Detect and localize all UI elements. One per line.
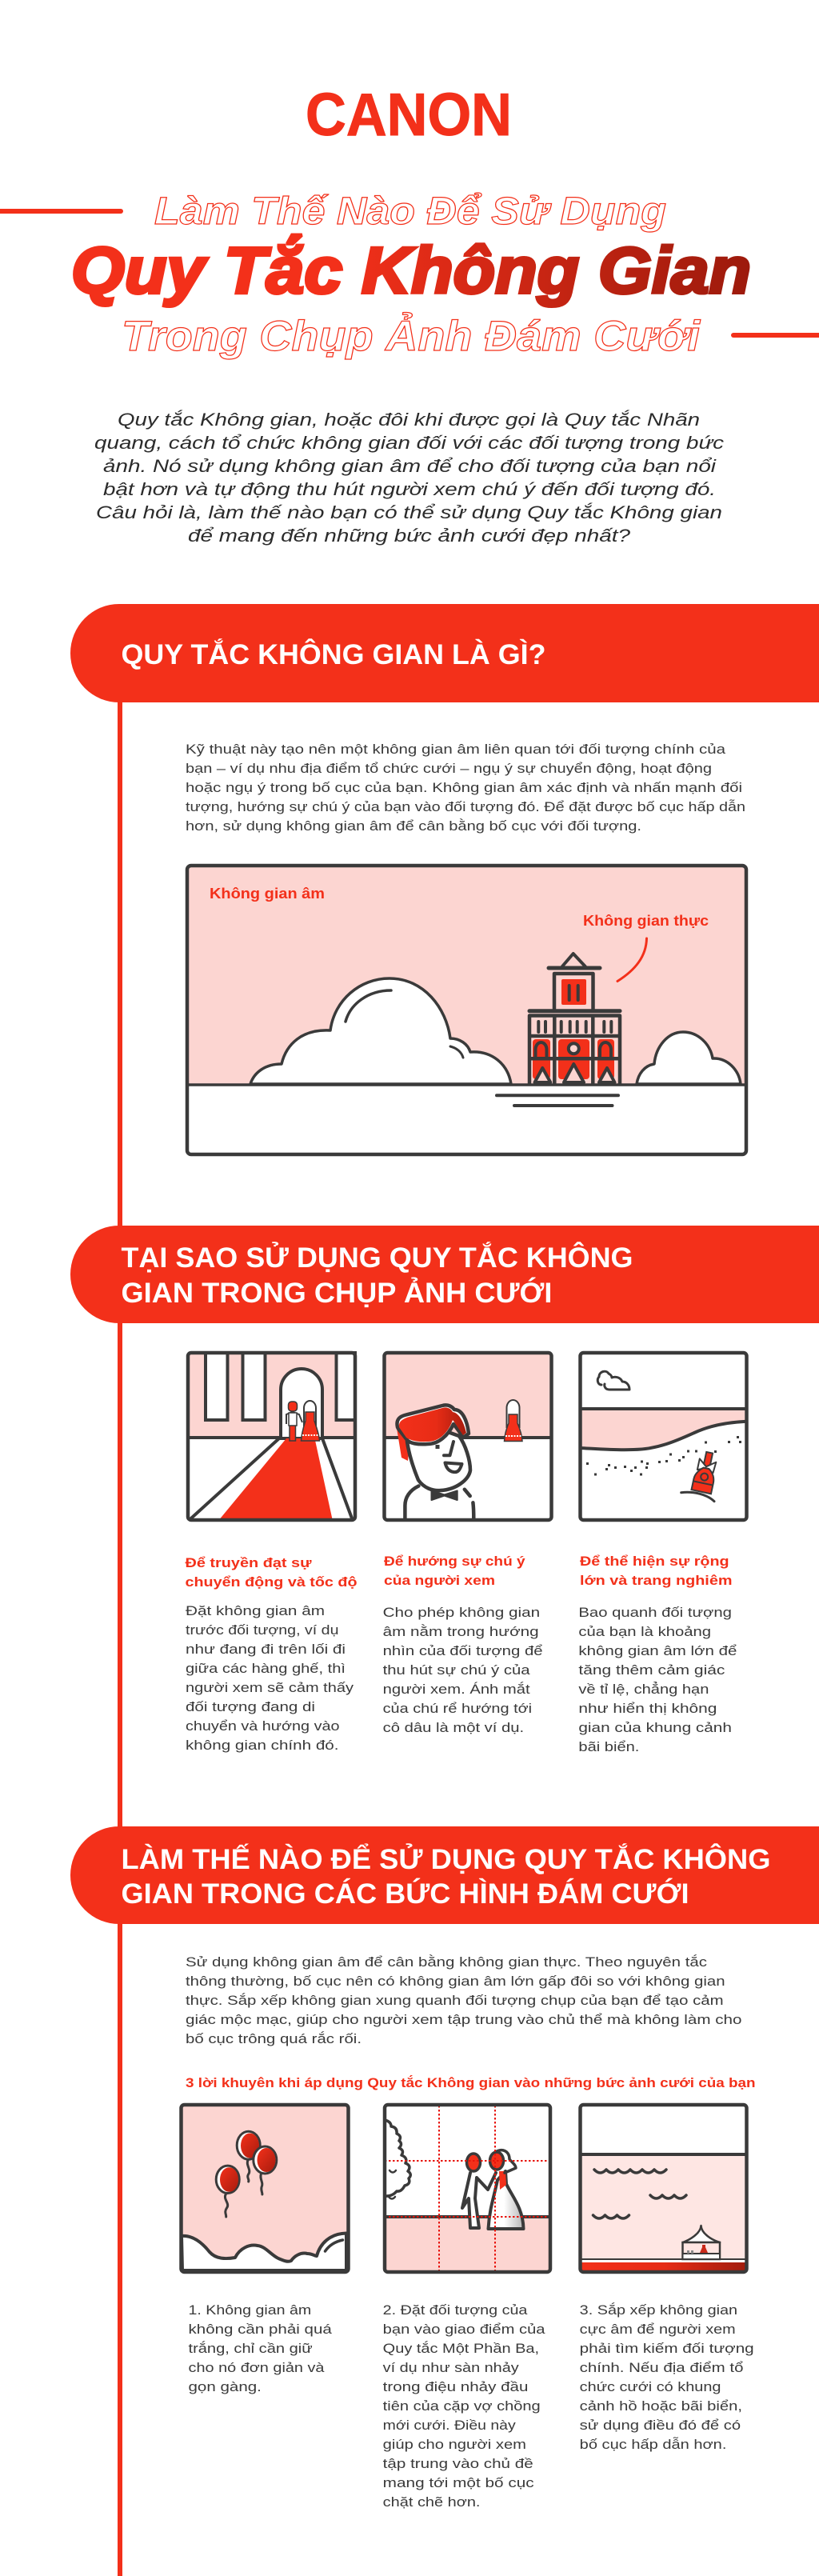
- red carpet: [220, 1438, 333, 1519]
- section 1 body text: [186, 742, 745, 834]
- panel: rule of thirds couple: [385, 2105, 550, 2272]
- section 3 header band: LÀM THẾ NÀO ĐỂ SỬ DỤNG QUY TẮC KHÔNG: [122, 1843, 771, 1875]
- section 1 body text: tượng, hướng sự chú ý của bạn vào đối tượng đó. Để đặt được bố cục hấp dẫn: [186, 799, 745, 814]
- title line 2: Quy Tắc Không Gian: [71, 234, 751, 307]
- column 2: directing attention: cô dâu là một ví dụ.: [383, 1720, 524, 1735]
- panel: aisle with couple: [188, 1353, 355, 1520]
- groom: [286, 1402, 302, 1441]
- intro paragraph: [94, 410, 724, 546]
- small bride: [504, 1400, 522, 1442]
- intro paragraph: để mang đến những bức ảnh cưới đẹp nhất?: [188, 526, 631, 546]
- tip 3 text: sử dụng điều đó để có: [580, 2418, 741, 2433]
- intro paragraph: Câu hỏi là, làm thế nào bạn có thể sử dụng Quy tắc Không gian: [96, 502, 722, 522]
- section 1 header band: QUY TẮC KHÔNG GIAN LÀ GÌ?: [122, 638, 545, 670]
- tips heading: 3 lời khuyên khi áp dụng Quy tắc Không gian vào những bức ảnh cưới của bạn: [186, 2075, 755, 2090]
- title line 1: Làm Thế Nào Để Sử Dụng: [154, 190, 666, 233]
- arched door: [281, 1369, 322, 1438]
- section 3 body text: giác mộc mạc, giúp cho người xem tập trung vào chủ thể mà không làm cho: [186, 2012, 742, 2027]
- section 3 body text: bố cục trông quá rắc rối.: [186, 2031, 362, 2046]
- column 3: scale and majesty: như hiển thị không: [578, 1701, 717, 1716]
- tip 3 text: chính. Nếu địa điểm tổ: [580, 2360, 744, 2375]
- hair: [397, 1405, 469, 1444]
- tip 2 text: giúp cho người xem: [383, 2437, 526, 2452]
- column 3: scale and majesty: của bạn là khoảng: [578, 1624, 711, 1639]
- title block: [0, 190, 819, 360]
- tip 2 text: 2. Đặt đối tượng của: [383, 2302, 528, 2318]
- red shore band: [581, 2262, 746, 2271]
- column 1: movement and speed: trước đối tượng, ví dụ: [186, 1622, 339, 1638]
- column 3: scale and majesty: tăng thêm cảm giác: [578, 1662, 725, 1678]
- column 2: directing attention: thu hút sự chú ý của: [383, 1662, 530, 1678]
- column 1: movement and speed: Đặt không gian âm: [186, 1603, 325, 1618]
- tip 3 text: phải tìm kiếm đối tượng: [580, 2341, 754, 2356]
- title line 3 rule: [731, 333, 819, 338]
- column 3: scale and majesty: lớn và trang nghiêm: [580, 1573, 733, 1588]
- column 3: scale and majesty: [578, 1554, 737, 1754]
- red hair shadow: [397, 1428, 410, 1461]
- column 3: scale and majesty: gian của khung cảnh: [578, 1720, 732, 1735]
- tip 3 text: 3. Sắp xếp không gian: [580, 2302, 737, 2318]
- tree: [385, 2120, 410, 2198]
- face details: [435, 1442, 462, 1472]
- tip 3 text: bố cục hấp dẫn hơn.: [580, 2437, 726, 2452]
- section 1 body text: hơn, sử dụng không gian âm để cân bằng bố cục với đối tượng.: [186, 818, 641, 834]
- panel: lake with small pavilion: [581, 2105, 747, 2272]
- shoulders and bow tie: [405, 1486, 473, 1519]
- column 1: movement and speed: người xem sẽ cảm thấy: [186, 1680, 354, 1695]
- section 1 header band: [70, 604, 819, 702]
- tip 1 text: không cần phải quá: [189, 2322, 332, 2337]
- column 3: scale and majesty: Bao quanh đối tượng: [578, 1605, 732, 1620]
- lone bride figure: [692, 1450, 719, 1494]
- column 3: scale and majesty: không gian âm lớn để: [578, 1643, 737, 1658]
- section 3 body text: thực. Sắp xếp không gian xung quanh đối tượng chụp của bạn để tạo cảm: [186, 1993, 724, 2008]
- icon: small cloud: [637, 1032, 741, 1084]
- column 2: directing attention: [383, 1554, 543, 1735]
- label: negative space: Không gian âm: [210, 886, 325, 902]
- intro paragraph: quang, cách tổ chức không gian đối với các đối tượng trong bức: [94, 433, 724, 453]
- column 2: directing attention: Cho phép không gian: [383, 1605, 540, 1620]
- groom: [462, 2154, 496, 2228]
- tip 2 text: tiên của cặp vợ chồng: [383, 2398, 541, 2414]
- section 2 header band: GIAN TRONG CHỤP ẢNH CƯỚI: [122, 1277, 552, 1309]
- section 3 body text: thông thường, bố cục nên có không gian âm lớn gấp đôi so với không gian: [186, 1974, 725, 1989]
- tip 2 text: mang tới một bố cục: [383, 2475, 534, 2490]
- title line 3: Trong Chụp Ảnh Đám Cưới: [122, 312, 701, 360]
- tip 2 text: mới cưới. Điều này: [383, 2418, 516, 2433]
- column 1: movement and speed: không gian chính đó.: [186, 1738, 339, 1753]
- title line 1 rule: [0, 209, 123, 214]
- balloon 3: [216, 2166, 239, 2194]
- pavilion: [683, 2226, 720, 2259]
- illustration: negative and positive space: [187, 866, 746, 1154]
- tip 2 text: chặt chẽ hơn.: [383, 2494, 480, 2510]
- column 2: directing attention: của chú rể hướng tới: [383, 1701, 532, 1716]
- tip 1 text: trắng, chỉ cần giữ: [189, 2341, 313, 2356]
- icon: small clouds: [597, 1371, 629, 1390]
- section 3 body text: Sử dụng không gian âm để cân bằng không gian thực. Theo nguyên tắc: [186, 1954, 708, 1970]
- bride: [488, 2150, 523, 2229]
- windows: [206, 1353, 355, 1420]
- hair fill: [399, 1407, 466, 1442]
- bride: [301, 1401, 320, 1441]
- panel: beach with lone bride: [581, 1353, 747, 1520]
- column 2: directing attention: Để hướng sự chú ý: [384, 1554, 525, 1569]
- section 3 body text: [186, 1954, 742, 2046]
- section 2 header band: [70, 1226, 819, 1323]
- tip 2 text: bạn vào giao điểm của: [383, 2322, 545, 2337]
- arrow: curved pointer: [617, 938, 646, 981]
- tip 2 text: tập trung vào chủ đề: [383, 2456, 533, 2471]
- section 3 header band: GIAN TRONG CÁC BỨC HÌNH ĐÁM CƯỚI: [122, 1878, 689, 1910]
- head: [407, 1432, 470, 1490]
- column 3: scale and majesty: bãi biển.: [578, 1739, 639, 1754]
- tip 3 text: [580, 2302, 754, 2452]
- aisle lines: [191, 1438, 352, 1518]
- intro paragraph: bật hơn và tự động thu hút người xem chú ý đến đối tượng đó.: [103, 479, 716, 499]
- clouds at bottom: [182, 2234, 346, 2270]
- column 1: movement and speed: chuyển và hướng vào: [186, 1718, 339, 1734]
- column 1: movement and speed: giữa các hàng ghế, thì: [186, 1661, 346, 1676]
- sand dots: [586, 1436, 741, 1475]
- intro paragraph: ảnh. Nó sử dụng không gian âm để cho đối tượng của bạn nổi: [103, 456, 717, 476]
- balloon 1: [237, 2131, 260, 2159]
- tip 1 text: gọn gàng.: [189, 2379, 262, 2394]
- tip 1 text: cho nó đơn giản và: [189, 2360, 325, 2375]
- tip 3 text: cảnh hồ hoặc bãi biển,: [580, 2398, 742, 2414]
- icon: church: [529, 954, 620, 1084]
- column 1: movement and speed: như đang đi trên lối đi: [186, 1642, 346, 1657]
- balloon 2: [254, 2146, 277, 2174]
- column 1: movement and speed: [186, 1555, 357, 1753]
- tip 1 text: 1. Không gian âm: [189, 2302, 311, 2318]
- tip 3 text: cực âm để người xem: [580, 2322, 736, 2337]
- column 2: directing attention: nhìn của đối tượng để: [383, 1643, 543, 1658]
- column 2: directing attention: người xem. Ánh mắt: [383, 1682, 530, 1697]
- tip 3 text: chức cưới có khung: [580, 2379, 721, 2394]
- section 1 body text: hoặc ngụ ý trong bố cục của bạn. Không gian âm xác định và nhấn mạnh đối: [186, 780, 742, 795]
- tip 2 text: Quy tắc Một Phần Ba,: [383, 2341, 539, 2356]
- vertical timeline line: [118, 688, 122, 2576]
- icon: large cloud: [250, 978, 511, 1084]
- label: positive space: Không gian thực: [583, 913, 709, 929]
- intro paragraph: Quy tắc Không gian, hoặc đôi khi được gọi là Quy tắc Nhãn: [118, 410, 700, 430]
- waves: [593, 2170, 686, 2218]
- column 2: directing attention: âm nằm trong hướng: [383, 1624, 539, 1639]
- column 3: scale and majesty: Để thể hiện sự rộng: [580, 1554, 729, 1569]
- column 1: movement and speed: Để truyền đạt sự: [186, 1555, 312, 1570]
- column 1: movement and speed: đối tượng đang di: [186, 1699, 315, 1714]
- tip 2 text: [383, 2302, 545, 2510]
- balloon strings: [225, 2159, 262, 2217]
- column 3: scale and majesty: về tỉ lệ, chẳng hạn: [578, 1682, 709, 1697]
- panel: groom looking at bride: [384, 1353, 552, 1520]
- column 1: movement and speed: chuyển động và tốc độ: [186, 1574, 357, 1590]
- rule of thirds grid: [385, 2106, 550, 2272]
- section 3 header band: [70, 1826, 819, 1924]
- tip 2 text: ví dụ như sàn nhảy: [383, 2360, 519, 2375]
- section 2 header band: TẠI SAO SỬ DỤNG QUY TẮC KHÔNG: [122, 1242, 633, 1274]
- column 2: directing attention: của người xem: [384, 1573, 495, 1588]
- logo: CANON: CANON: [306, 81, 512, 148]
- tip 2 text: trong điệu nhảy đầu: [383, 2379, 528, 2394]
- panel: balloons: [181, 2105, 349, 2272]
- section 1 body text: bạn – ví dụ nhu địa điểm tổ chức cưới – ngụ ý sự chuyển động, hoạt động: [186, 761, 712, 776]
- section 1 body text: Kỹ thuật này tạo nên một không gian âm liên quan tới đối tượng chính của: [186, 742, 726, 757]
- tip 1 text: [189, 2302, 332, 2394]
